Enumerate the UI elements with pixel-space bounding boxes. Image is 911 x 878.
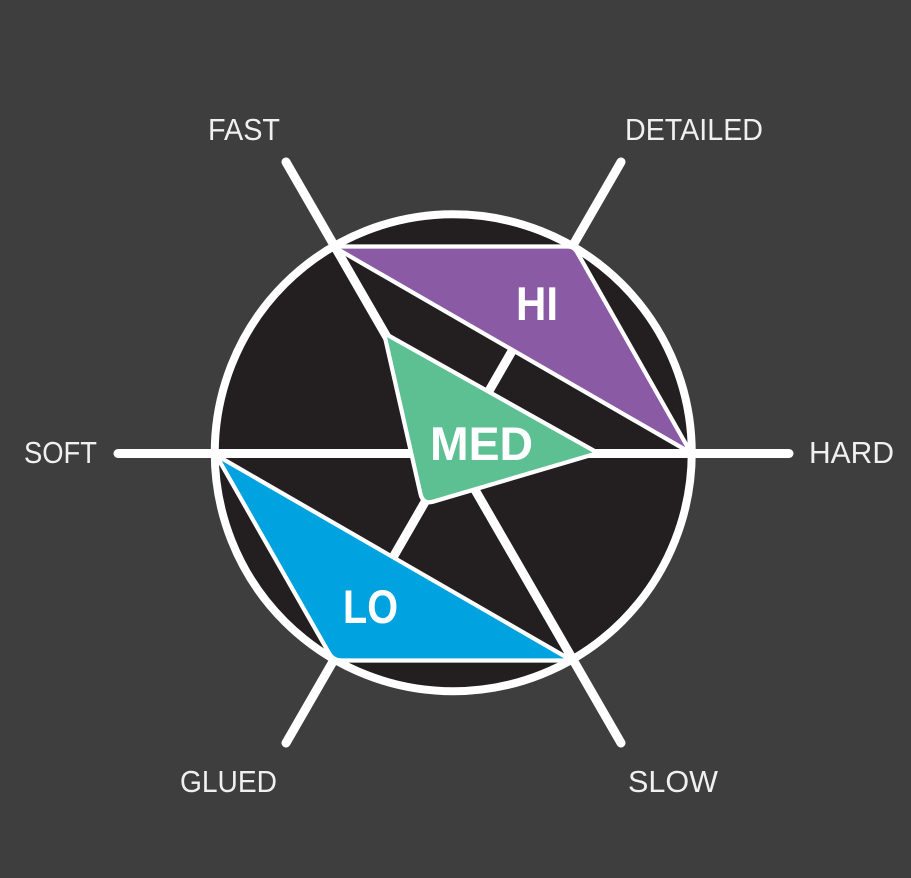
- axis lines: [118, 162, 789, 743]
- label: LO: LO: [343, 580, 398, 633]
- polygon: HI: [333, 246, 691, 453]
- label: DETAILED: DETAILED: [625, 112, 763, 147]
- label: SOFT: SOFT: [24, 435, 97, 470]
- label: HI: HI: [516, 277, 558, 330]
- radar circle: [215, 214, 692, 691]
- polygon: MED: [384, 333, 598, 502]
- label: GLUED: GLUED: [180, 764, 277, 799]
- polygon: LO: [216, 455, 572, 660]
- label: SLOW: SLOW: [628, 764, 719, 799]
- label: FAST: FAST: [208, 112, 280, 147]
- label: HARD: HARD: [809, 435, 894, 470]
- label: MED: MED: [430, 417, 533, 470]
